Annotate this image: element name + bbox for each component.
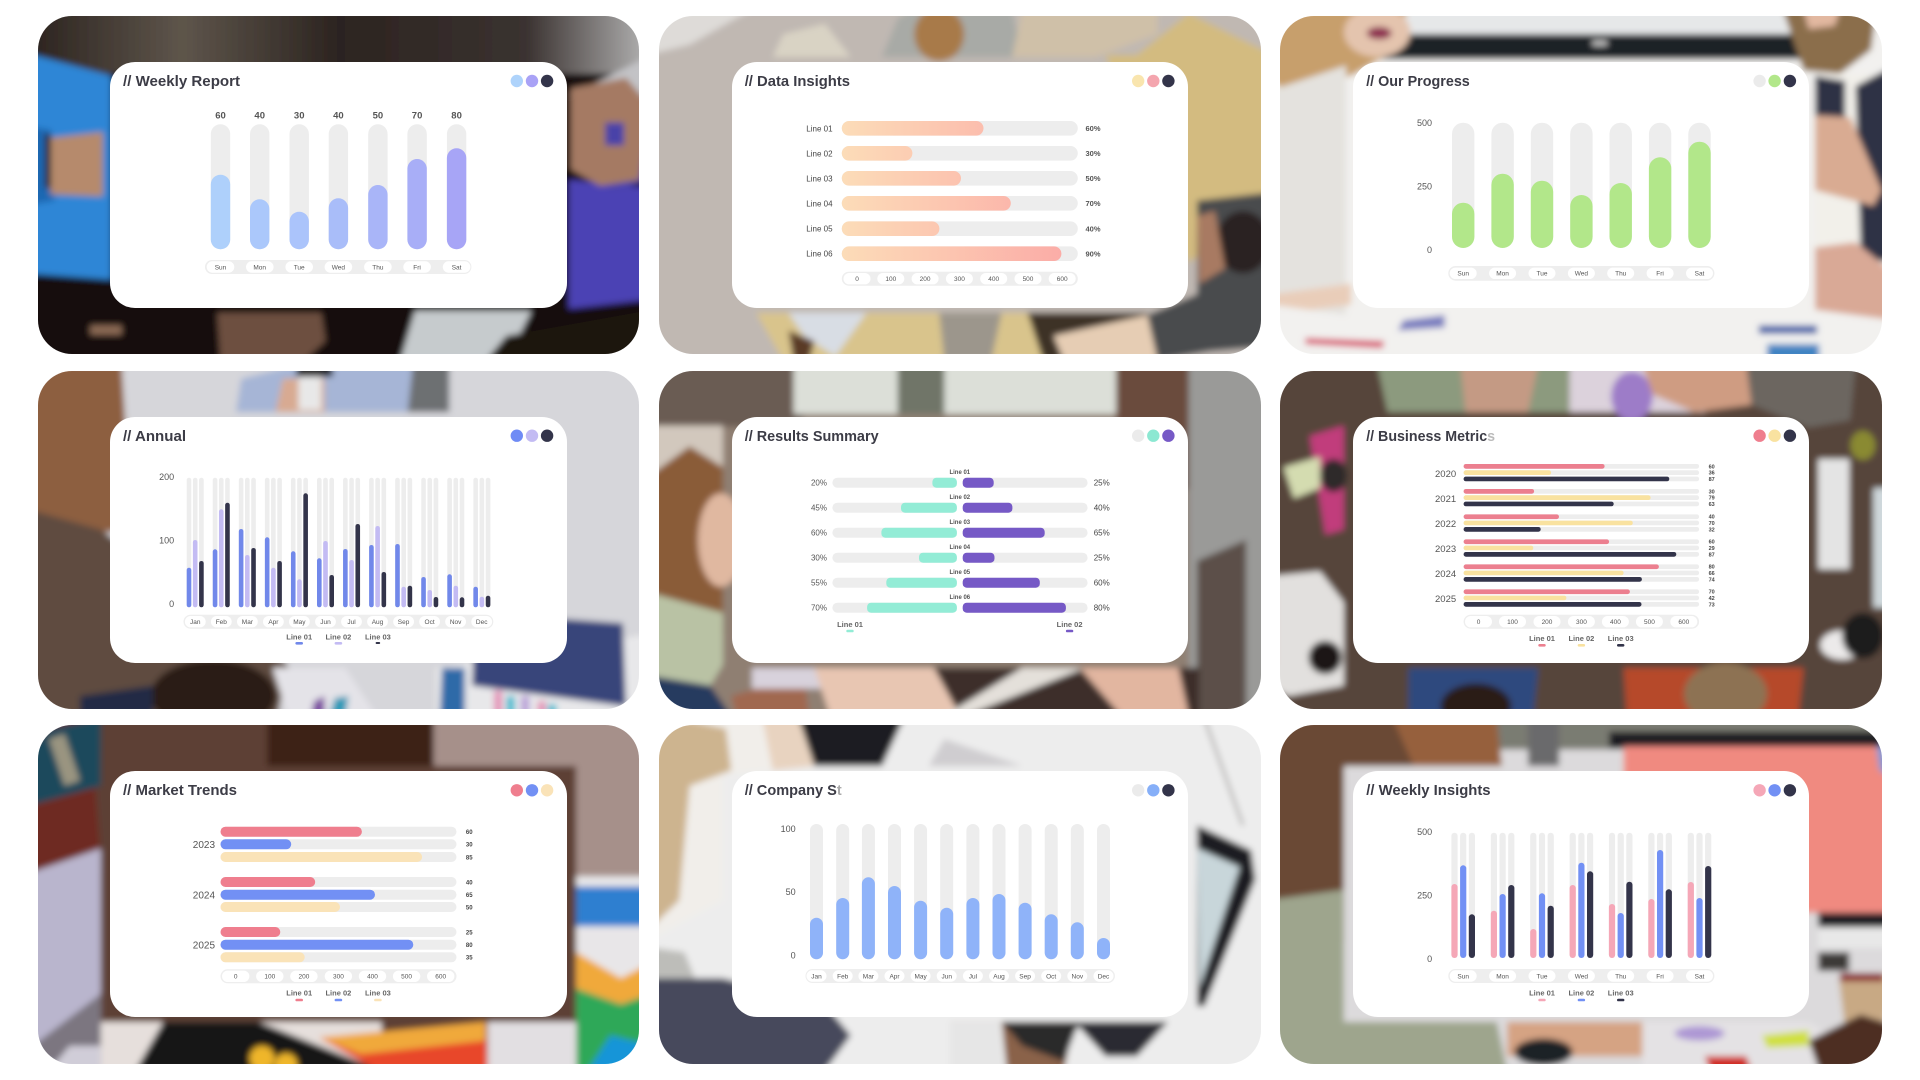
diverging bar chart: Line 03 — [949, 520, 971, 526]
axis: scale 0 to 600: 600 — [1678, 619, 1690, 626]
axis: months: Jan — [190, 619, 201, 626]
heading: Results Summary: // Results Summary — [745, 428, 879, 445]
panel: Data Insights — [647, 7, 1273, 361]
panel: Company St — [647, 718, 1273, 1071]
bar values: 85 — [466, 855, 473, 861]
bar values: 30 — [1709, 489, 1715, 495]
bar values: 80 — [466, 943, 473, 949]
heading: Annual: // Annual — [123, 428, 186, 445]
bar values: 50 — [466, 905, 473, 911]
axis: months: Jul — [969, 973, 978, 980]
panel: Results Summary — [647, 364, 1273, 716]
axis: months: Jul — [347, 619, 356, 626]
axis: days — [205, 260, 471, 274]
bar values: 35 — [466, 956, 473, 962]
bar values — [466, 830, 473, 962]
axis: months: Apr — [268, 619, 279, 626]
photo: woman and laptop on white desk — [647, 718, 1273, 1071]
card: Company St — [732, 771, 1188, 1017]
y axis labels: 100 — [159, 536, 174, 546]
axis: months: Dec — [476, 619, 488, 626]
heading: Weekly Report: // Weekly Report — [123, 73, 240, 90]
diverging bar chart: 25% — [1094, 554, 1110, 563]
axis: months: Sep — [398, 619, 410, 626]
y axis labels: 500 — [1417, 827, 1432, 837]
y axis labels: 0 — [169, 599, 174, 609]
y axis labels: 100 — [781, 824, 796, 834]
card: Business Metrics — [1353, 417, 1809, 663]
axis: days: Fri — [1656, 271, 1664, 278]
axis: days: Fri — [1656, 973, 1664, 980]
horizontal bar chart: line percentages: 90% — [1086, 249, 1101, 258]
axis: scale 0 to 600: 400 — [1610, 619, 1621, 626]
y axis labels — [159, 472, 174, 609]
panel: Weekly Insights — [1268, 718, 1894, 1071]
diverging bar chart: 55% — [811, 579, 827, 588]
card: Our Progress — [1353, 62, 1809, 308]
horizontal bar chart: line percentages: 60% — [1086, 124, 1101, 133]
bar values: 70 — [1709, 590, 1715, 596]
grouped bar chart: annual lines by month — [187, 478, 490, 607]
y axis labels: 0 — [791, 950, 796, 960]
axis: scale 0 to 600: 600 — [435, 974, 447, 981]
horizontal bar chart: line percentages: Line 05 — [806, 225, 833, 234]
bar values: 60 — [1709, 540, 1715, 546]
y axis labels — [1417, 827, 1432, 964]
legend: Line 03 — [365, 632, 391, 641]
bar chart: weekly values: 70 — [412, 110, 422, 122]
axis: scale 0 to 600: 400 — [367, 974, 378, 981]
diverging bar chart: 60% — [811, 529, 827, 538]
y axis labels: 50 — [786, 887, 796, 897]
axis: scale 0 to 600: 0 — [234, 974, 238, 981]
legend: Line 02 — [325, 632, 351, 641]
year labels: 2024 — [193, 890, 215, 902]
axis: months: Feb — [837, 973, 849, 980]
photo: desk with calculator and colourful printed charts — [26, 718, 651, 1076]
horizontal bar chart: line percentages: Line 03 — [806, 174, 833, 183]
bar chart: weekly values: 30 — [294, 110, 304, 122]
year labels — [1435, 469, 1456, 605]
axis: months: Nov — [1072, 973, 1084, 980]
legend dots — [511, 75, 553, 87]
bar chart: weekly values: 40 — [254, 110, 265, 122]
year labels: 2021 — [1435, 494, 1456, 505]
axis: scale 0 to 600: 0 — [855, 276, 859, 283]
axis: scale 0 to 600: 100 — [264, 974, 276, 981]
photo: hands on dark table with blue and purple panels — [26, 9, 651, 361]
year labels: 2022 — [1435, 519, 1456, 530]
diverging bar chart: 60% — [1094, 579, 1110, 588]
card: Weekly Insights — [1353, 771, 1809, 1017]
axis: months: Feb — [216, 619, 227, 626]
axis: scale 0 to 600 — [1464, 615, 1699, 629]
axis: months: Oct — [1046, 973, 1056, 980]
axis: months: Aug — [993, 973, 1005, 980]
bar values: 30 — [466, 843, 473, 849]
axis: days: Thu — [1615, 271, 1627, 278]
photo: blurred living room meeting with tablet — [647, 364, 1273, 716]
legend: Line 01 — [1529, 634, 1555, 643]
diverging bar chart: 70% — [811, 604, 827, 613]
axis: scale 0 to 600: 200 — [298, 974, 310, 981]
heading: Our Progress: // Our Progress — [1366, 73, 1470, 90]
axis: months: May — [914, 973, 927, 980]
axis: days: Sat — [1695, 271, 1705, 278]
diverging bar chart: 65% — [1094, 529, 1110, 538]
y axis labels: 200 — [159, 472, 174, 482]
legend: Line 02 — [325, 989, 351, 998]
y axis labels — [1417, 118, 1432, 255]
legend: Line 03 — [1608, 989, 1634, 998]
bar chart: weekly values: 60 — [215, 110, 226, 122]
panel: Annual — [38, 371, 639, 709]
diverging bar chart: Line 01 — [949, 470, 971, 476]
axis: days — [1448, 969, 1714, 983]
bar chart: weekly values: 40 — [333, 110, 344, 122]
horizontal bar chart: line percentages: 30% — [1086, 149, 1101, 158]
diverging bar chart: Line 06 — [949, 595, 971, 601]
axis: scale 0 to 600: 400 — [988, 276, 1000, 283]
card: Results Summary — [732, 417, 1188, 663]
axis: days: Sun — [1457, 271, 1469, 278]
diverging bar chart: Line 04 — [949, 545, 971, 551]
legend: Line 02 — [1568, 634, 1594, 643]
axis: months: Apr — [889, 973, 900, 980]
bar values: 60 — [1709, 464, 1715, 470]
legend — [286, 989, 391, 1001]
photo: woman with dreadlocks and salmon monitor — [1268, 718, 1894, 1071]
bar values: 87 — [1709, 477, 1715, 483]
year labels: 2020 — [1435, 469, 1456, 480]
horizontal bar chart: line percentages: 40% — [1086, 224, 1101, 233]
axis: days: Sun — [1457, 973, 1469, 980]
legend: Line 01 — [286, 989, 312, 998]
bar values: 25 — [466, 930, 473, 936]
legend: Line 01 — [837, 620, 863, 629]
panel: Our Progress — [1268, 7, 1898, 361]
axis: scale 0 to 600: 500 — [401, 974, 412, 981]
axis: scale 0 to 600 — [220, 969, 456, 983]
bar chart: weekly values: 80 — [451, 110, 462, 122]
axis: scale 0 to 600: 200 — [920, 276, 931, 283]
horizontal bar chart: line percentages: 50% — [1086, 174, 1101, 183]
grouped bar chart: days — [1451, 833, 1711, 958]
axis: days: Mon — [253, 264, 266, 271]
horizontal bar chart: line percentages: Line 06 — [806, 250, 833, 259]
heading: Market Trends: // Market Trends — [123, 782, 237, 799]
y axis labels: 500 — [1417, 118, 1432, 128]
card: Data Insights — [732, 62, 1188, 308]
y axis labels: 250 — [1417, 890, 1432, 900]
axis: days: Sun — [215, 264, 227, 271]
legend dots — [1132, 75, 1175, 87]
axis: months: Dec — [1098, 973, 1110, 980]
panel: Weekly Report — [26, 9, 651, 361]
legend dots — [1753, 784, 1796, 796]
bar values: 87 — [1709, 552, 1715, 558]
bar values: 74 — [1709, 577, 1716, 583]
horizontal bar chart: line percentages: Line 02 — [806, 149, 833, 158]
legend dots — [1132, 784, 1175, 796]
legend — [837, 620, 1083, 632]
diverging bar chart: 25% — [1094, 479, 1110, 488]
year labels — [193, 840, 215, 952]
axis: months: Mar — [863, 973, 875, 980]
y axis labels — [781, 824, 796, 960]
year labels: 2025 — [1435, 594, 1456, 605]
axis: days: Sat — [1695, 973, 1705, 980]
axis: scale 0 to 600: 600 — [1057, 276, 1068, 283]
legend: Line 01 — [1529, 989, 1555, 998]
card: Weekly Report — [110, 62, 567, 308]
bar chart: monthly values — [810, 824, 1110, 959]
axis: days: Mon — [1496, 271, 1509, 278]
axis: days — [1448, 266, 1714, 281]
bar values: 60 — [466, 830, 473, 836]
bar values: 70 — [1709, 521, 1715, 527]
legend: Line 02 — [1057, 620, 1083, 629]
diverging bar chart: 40% — [1094, 504, 1110, 513]
year labels: 2025 — [193, 940, 215, 952]
heading: Weekly Insights: // Weekly Insights — [1366, 782, 1491, 799]
axis: days: Wed — [1575, 271, 1588, 278]
heading: Business Metrics: // Business Metrics — [1366, 428, 1495, 445]
axis: days: Wed — [332, 264, 345, 271]
axis: days: Mon — [1496, 973, 1509, 980]
axis: days: Tue — [294, 264, 305, 271]
card: Annual — [110, 417, 567, 663]
grouped horizontal bars — [1464, 464, 1699, 607]
year labels: 2023 — [193, 840, 215, 851]
legend: Line 03 — [1608, 634, 1634, 643]
legend dots — [1132, 430, 1175, 442]
bar chart: weekly values: 50 — [373, 110, 383, 122]
axis: scale 0 to 600 — [842, 272, 1078, 286]
diverging bar chart: 20% — [811, 479, 827, 488]
axis: scale 0 to 600: 300 — [954, 276, 965, 283]
axis: months — [806, 969, 1115, 983]
legend: Line 03 — [365, 989, 391, 998]
legend dots — [1753, 430, 1796, 442]
axis: days: Fri — [413, 264, 421, 271]
axis: scale 0 to 600: 100 — [1507, 619, 1518, 626]
bar values: 40 — [466, 880, 473, 886]
bar values: 65 — [466, 893, 473, 899]
axis: days: Thu — [372, 264, 384, 271]
diverging bar chart: 30% — [811, 554, 827, 563]
bar values: 63 — [1709, 502, 1715, 508]
legend dots — [511, 430, 553, 442]
bar values: 79 — [1709, 496, 1715, 502]
horizontal bar chart: line percentages: Line 01 — [806, 124, 833, 133]
photo: two people reviewing charts in front of a monitor — [1268, 7, 1898, 361]
axis: months: Sep — [1019, 973, 1031, 980]
axis: days: Sat — [452, 264, 462, 271]
photo: overhead meeting around wooden table — [647, 7, 1273, 361]
legend — [1529, 634, 1634, 647]
diverging bar chart: Line 05 — [949, 570, 971, 576]
bar values — [1709, 464, 1716, 608]
horizontal bar chart: line percentages: 70% — [1086, 199, 1101, 208]
axis: months: May — [293, 619, 306, 626]
photo: overhead team at wooden desk — [1280, 371, 1882, 709]
legend: Line 01 — [286, 632, 312, 641]
bar values: 40 — [1709, 515, 1715, 521]
legend: Line 02 — [1568, 989, 1594, 998]
horizontal bar chart: line percentages: Line 04 — [806, 199, 833, 208]
legend dots — [511, 784, 553, 796]
heading: Data Insights: // Data Insights — [745, 73, 850, 90]
diverging bar chart — [811, 470, 1110, 613]
axis: scale 0 to 600: 500 — [1644, 619, 1655, 626]
bar chart: weekly values — [211, 110, 466, 249]
bar values: 80 — [1709, 565, 1715, 571]
bar values: 42 — [1709, 596, 1715, 602]
y axis labels: 0 — [1427, 245, 1432, 255]
axis: days: Wed — [1575, 973, 1588, 980]
heading: Company St (typing in): // Company St — [745, 782, 842, 799]
card: Market Trends — [110, 771, 567, 1017]
axis: scale 0 to 600: 300 — [333, 974, 344, 981]
legend dots — [1753, 75, 1796, 87]
bar values: 66 — [1709, 571, 1715, 577]
grouped horizontal bars — [220, 827, 456, 962]
diverging bar chart: 80% — [1094, 604, 1110, 613]
axis: scale 0 to 600: 100 — [885, 276, 897, 283]
year labels: 2023 — [1435, 544, 1456, 555]
y axis labels: 250 — [1417, 182, 1432, 192]
panel: Business Metrics — [1280, 371, 1882, 709]
axis: months: Jun — [941, 973, 952, 980]
horizontal bar chart: line percentages — [806, 121, 1101, 261]
axis: months: Nov — [450, 619, 462, 626]
bar values: 36 — [1709, 471, 1715, 477]
bar values: 32 — [1709, 527, 1715, 533]
axis: days: Tue — [1537, 973, 1548, 980]
diverging bar chart: 45% — [811, 504, 827, 513]
photo: overhead office meeting with coffee and folder — [38, 371, 639, 709]
bar values: 29 — [1709, 546, 1715, 552]
axis: scale 0 to 600: 300 — [1576, 619, 1587, 626]
axis: months: Aug — [372, 619, 384, 626]
axis: months: Jan — [811, 973, 822, 980]
axis: scale 0 to 600: 500 — [1023, 276, 1034, 283]
diverging bar chart: Line 02 — [949, 495, 971, 501]
axis: days: Tue — [1537, 271, 1548, 278]
panel: Market Trends — [26, 718, 651, 1076]
year labels: 2024 — [1435, 569, 1456, 580]
y axis labels: 0 — [1427, 954, 1432, 964]
axis: months: Oct — [425, 619, 435, 626]
axis: months — [184, 615, 493, 629]
axis: scale 0 to 600: 0 — [1477, 619, 1481, 626]
axis: months: Jun — [320, 619, 331, 626]
axis: days: Thu — [1615, 973, 1627, 980]
bar chart: progress by day — [1452, 123, 1711, 248]
axis: scale 0 to 600: 200 — [1542, 619, 1553, 626]
axis: months: Mar — [242, 619, 254, 626]
bar values: 73 — [1709, 602, 1715, 608]
legend — [286, 632, 391, 645]
legend — [1529, 989, 1634, 1001]
